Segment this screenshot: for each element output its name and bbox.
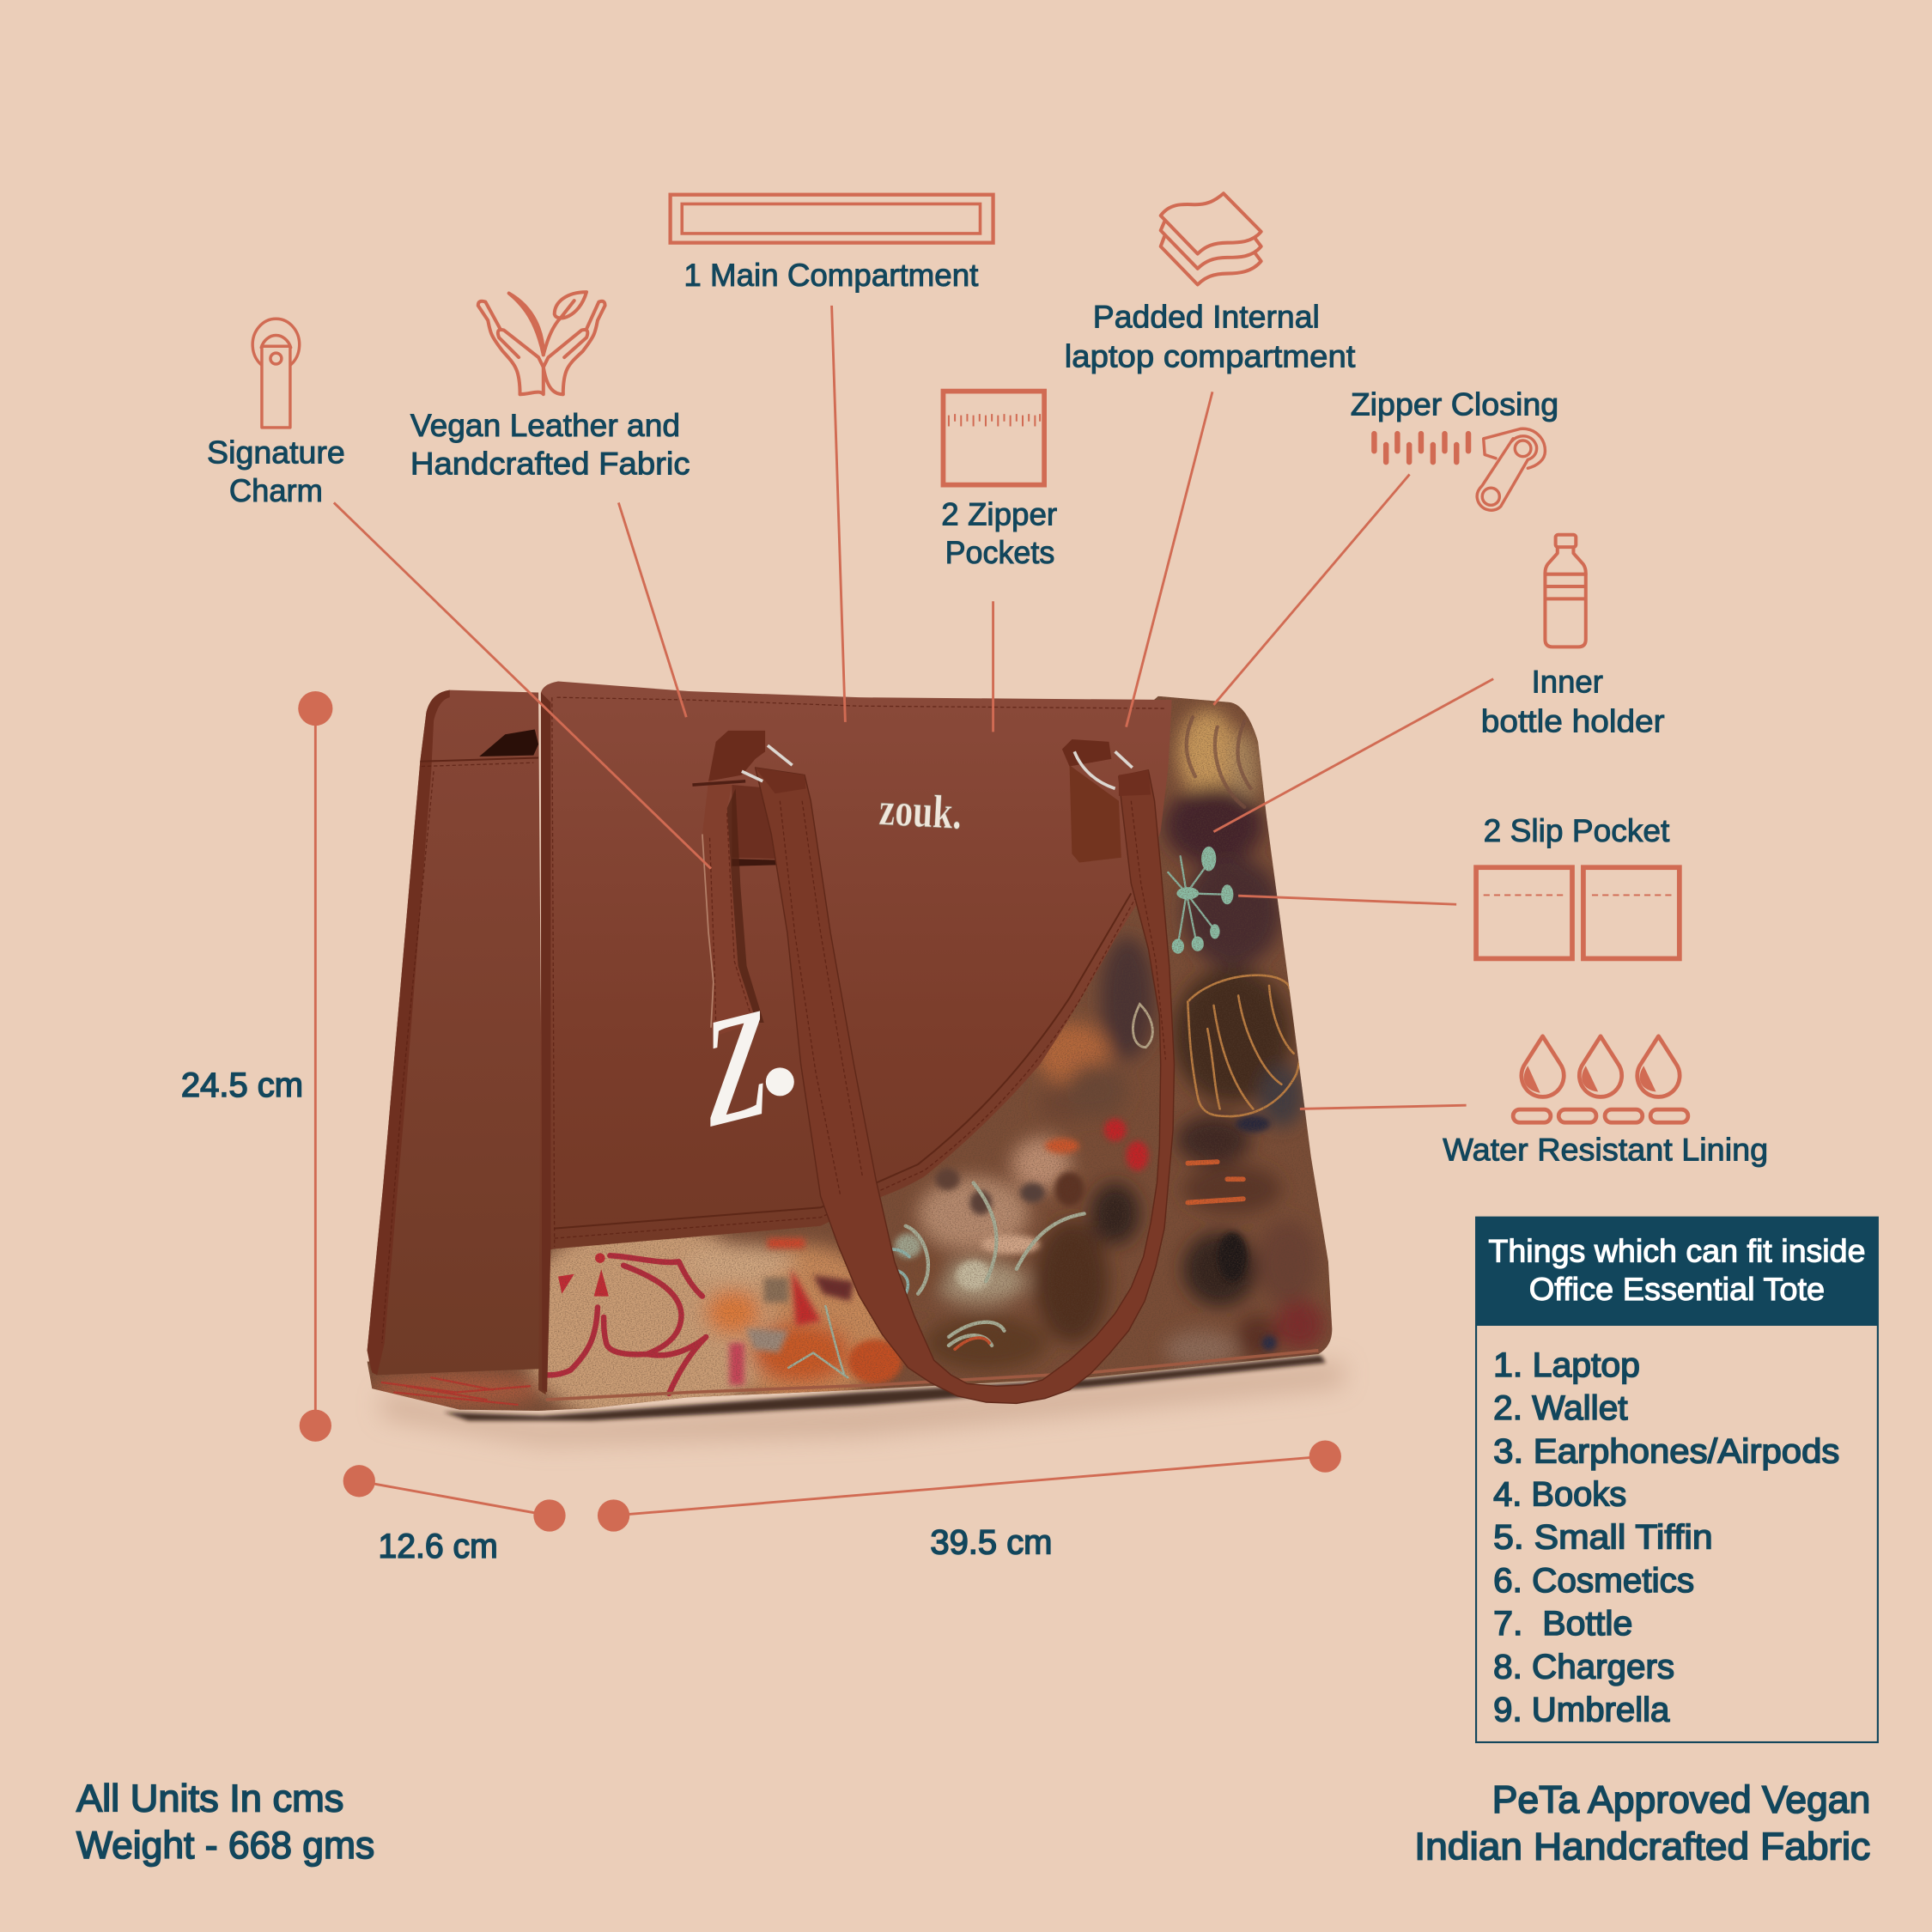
callout: vegan leather: Handcrafted Fabric (410, 445, 690, 481)
item list: 8. Chargers (1493, 1647, 1674, 1686)
icon: slip pockets (1476, 867, 1680, 958)
brand logo: zouk. (878, 782, 963, 839)
callout: inner bottle holder: Inner (1532, 663, 1603, 699)
item list: 5. Small Tiffin (1493, 1518, 1713, 1557)
callout: signature charm: Charm (229, 472, 323, 508)
callout: slip pockets: 2 Slip Pocket (1484, 812, 1670, 848)
panel header (1476, 1218, 1878, 1326)
panel: things which fit inside (1476, 1218, 1878, 1742)
blurred colour fields (369, 710, 1325, 1430)
icon: padded layers (1161, 193, 1261, 284)
footnote: vegan approval: Indian Handcrafted Fabric (1414, 1826, 1870, 1868)
callout: inner bottle holder: bottle holder (1481, 702, 1665, 738)
callout: zipper closing: Zipper Closing (1351, 386, 1558, 422)
bag photo illustration (357, 682, 1355, 1444)
fabric panels (357, 690, 1355, 1430)
callout: main compartment (671, 195, 993, 722)
icon: zipper pocket (943, 392, 1044, 485)
teal flower buds (1172, 847, 1233, 954)
callout: vegan leather (410, 292, 690, 717)
footnote: vegan approval: PeTa Approved Vegan (1492, 1779, 1870, 1821)
callout: padded laptop compartment: Padded Internal (1093, 299, 1320, 335)
icon: water drops (1513, 1036, 1688, 1122)
callout: water resistant lining: Water Resistant Lining (1443, 1132, 1768, 1168)
callout: zipper closing (1213, 386, 1558, 705)
dimension: depth (343, 1465, 566, 1565)
panel header: Office Essential Tote (1529, 1271, 1825, 1307)
metal rings (742, 745, 1133, 788)
item list: 9. Umbrella (1493, 1691, 1670, 1729)
handle straps (756, 768, 1175, 1403)
floral line work (382, 717, 1300, 1405)
footnote: units and weight (76, 1777, 374, 1867)
item list: 6. Cosmetics (1493, 1561, 1694, 1600)
footnote: units and weight: All Units In cms (76, 1777, 343, 1820)
charm strap with loop (692, 731, 765, 1035)
dimension: height: 24.5 cm (181, 1066, 303, 1104)
item list (1493, 1346, 1839, 1729)
item list: 7. Bottle (1493, 1604, 1632, 1643)
panel header: Things which can fit inside (1488, 1232, 1866, 1268)
left side leather panel (368, 690, 544, 1375)
callout: padded laptop compartment (1065, 193, 1356, 727)
footnote: vegan approval (1414, 1779, 1870, 1868)
dimension: depth: 12.6 cm (379, 1527, 498, 1565)
item list: 2. Wallet (1493, 1388, 1628, 1427)
dimension: height (181, 691, 332, 1442)
front leather panel (538, 682, 1172, 1394)
callout: zipper pockets: Pockets (945, 534, 1054, 570)
footnote: units and weight: Weight - 668 gms (76, 1825, 374, 1867)
callout: water resistant lining (1300, 1036, 1768, 1168)
icon: charm (252, 319, 300, 428)
item list: 4. Books (1493, 1475, 1626, 1514)
item list: 3. Earphones/Airpods (1493, 1431, 1839, 1470)
callout: signature charm: Signature (207, 434, 345, 471)
crisp print details (729, 1115, 1277, 1385)
callout: zipper pockets: 2 Zipper (941, 495, 1057, 532)
callout: inner bottle holder (1213, 535, 1665, 832)
callout: slip pockets (1238, 812, 1680, 958)
icon: hands with leaf (478, 292, 605, 394)
dimension: width: 39.5 cm (930, 1522, 1052, 1561)
callout: vegan leather: Vegan Leather and (410, 407, 680, 443)
icon: compartment (671, 195, 993, 243)
icon: zipper pull (1374, 428, 1545, 510)
item list: 1. Laptop (1493, 1346, 1640, 1384)
charm logo: Z (706, 973, 768, 1163)
callout: main compartment: 1 Main Compartment (683, 257, 979, 293)
callout: padded laptop compartment: laptop compartment (1065, 338, 1356, 374)
dimension: width (598, 1440, 1341, 1561)
left strap top tab (756, 768, 805, 793)
back tabs (732, 739, 1121, 866)
callout: signature charm (207, 319, 711, 869)
right strap top tab (1119, 770, 1151, 796)
icon: bottle (1545, 535, 1586, 647)
callout: zipper pockets (941, 392, 1057, 732)
